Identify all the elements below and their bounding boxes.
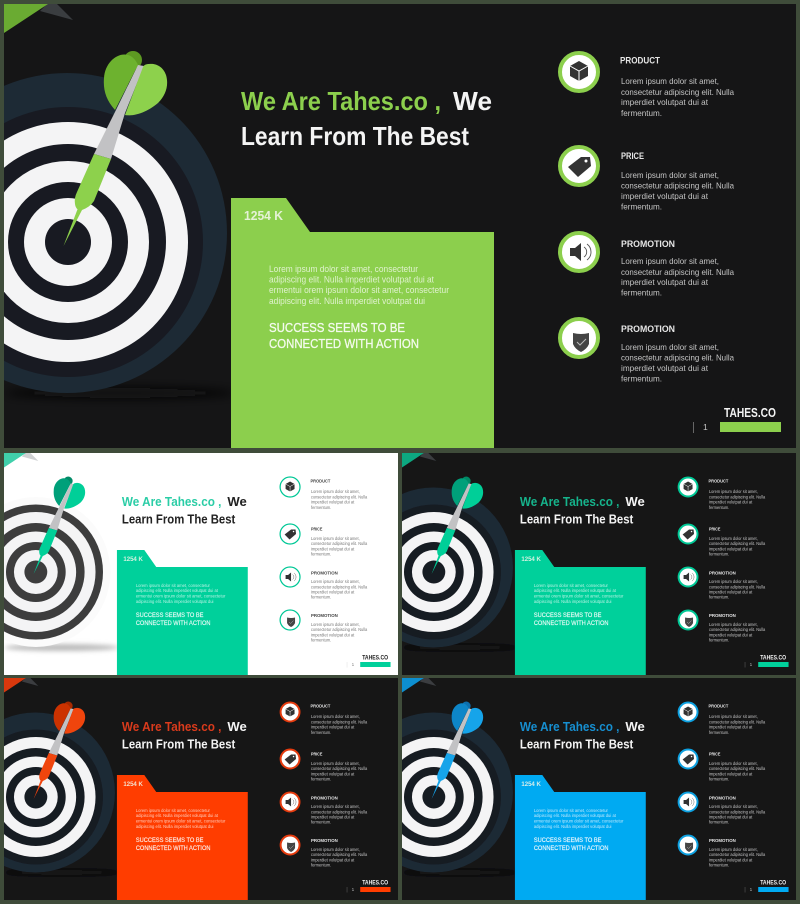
heading: We Are Tahes.co ,: [122, 494, 221, 509]
panel: blue folder card: Lorem ipsum dolor sit amet, consectetur: [534, 808, 608, 814]
panel: green folder card: ermentui orem ipsum dolor sit amet, consectetur: [269, 285, 449, 296]
heading: Learn From The Best: [520, 511, 634, 527]
feature: price: consectetur adipiscing elit. Nulla: [709, 766, 766, 771]
feature: product: PRODUCT: [708, 479, 729, 484]
feature: price: PRICE: [709, 526, 720, 532]
icon: dart: [34, 476, 85, 574]
feature: price: [679, 524, 766, 557]
feature: price: PRICE: [311, 751, 322, 757]
panel: blue folder card: SUCCESS SEEMS TO BE: [534, 837, 601, 844]
footer brand: 1: [750, 662, 753, 667]
feature: promotion speaker: fermentum.: [311, 820, 331, 825]
feature: price: imperdiet volutpat dui at: [709, 771, 753, 777]
footer brand: [745, 654, 789, 668]
heading: [520, 496, 644, 524]
footer brand: 1: [750, 887, 753, 892]
panel: blue folder card: ermentui orem ipsum dolor sit amet, consectetur: [534, 818, 624, 825]
corner ribbon: [4, 4, 73, 33]
panel: teal folder card: adipiscing elit. Nulla imperdiet volutpat dui: [136, 599, 213, 605]
feature: product: consectetur adipiscing elit. Nulla: [709, 719, 766, 725]
feature: promotion shield: imperdiet volutpat dui at: [709, 632, 753, 638]
panel: red folder card: SUCCESS SEEMS TO BE: [136, 837, 203, 844]
feature: price: fermentum.: [709, 777, 729, 782]
feature: price: PRICE: [709, 751, 720, 757]
panel: red folder card: Lorem ipsum dolor sit amet, consectetur: [136, 808, 210, 814]
icon: dartboard target: [0, 497, 119, 651]
heading: We: [625, 494, 645, 509]
feature: product: [281, 702, 368, 735]
feature: product: Lorem ipsum dolor sit amet,: [311, 489, 360, 494]
feature: promotion shield: consectetur adipiscing elit. Nulla: [311, 852, 368, 857]
feature: product: PRODUCT: [708, 704, 729, 709]
footer brand: 1: [352, 662, 355, 667]
panel: dark blue slide: [354, 678, 796, 900]
heading: We: [453, 86, 492, 116]
feature: product: [679, 478, 766, 510]
feature: price: Lorem ipsum dolor sit amet,: [311, 536, 360, 541]
feature: promotion shield: PROMOTION: [709, 838, 736, 843]
panel: green folder card: SUCCESS SEEMS TO BE: [269, 321, 405, 335]
feature: price: Lorem ipsum dolor sit amet,: [709, 761, 758, 766]
feature: promotion shield: fermentum.: [709, 638, 729, 643]
heading: Learn From The Best: [122, 511, 236, 527]
feature: promotion speaker: Lorem ipsum dolor sit amet,: [709, 579, 758, 584]
feature: promotion shield: PROMOTION: [621, 324, 675, 334]
heading: We Are Tahes.co ,: [520, 494, 619, 509]
feature: promotion shield: fermentum.: [311, 638, 331, 643]
footer brand: [745, 879, 789, 892]
feature: promotion shield: consectetur adipiscing elit. Nulla: [709, 627, 766, 632]
icon: dartboard target: [0, 73, 235, 398]
corner ribbon: [4, 678, 38, 692]
footer brand: TAHES.CO: [362, 654, 388, 662]
panel: blue folder card: adipiscing elit. Nulla imperdiet volutpat dui: [534, 824, 611, 830]
panel: teal folder card: SUCCESS SEEMS TO BE: [136, 612, 203, 619]
icon: dartboard target: [354, 712, 517, 875]
feature: product: imperdiet volutpat dui at: [709, 724, 753, 730]
panel: teal folder card: Lorem ipsum dolor sit amet, consectetur: [136, 583, 210, 589]
feature: promotion speaker: [281, 792, 368, 825]
feature: product: imperdiet volutpat dui at: [311, 724, 355, 730]
feature: price: consectetur adipiscing elit. Nulla: [709, 541, 766, 546]
feature: promotion shield: fermentum.: [311, 863, 331, 868]
feature: price: consectetur adipiscing elit. Nulla: [311, 541, 368, 546]
panel: blue folder card: CONNECTED WITH ACTION: [534, 845, 608, 852]
feature: promotion speaker: PROMOTION: [709, 570, 736, 576]
feature: promotion shield: imperdiet volutpat dui at: [709, 857, 753, 863]
heading: Learn From The Best: [122, 736, 236, 752]
feature: promotion speaker: fermentum.: [709, 820, 729, 825]
panel: green folder card: Lorem ipsum dolor sit amet, consectetur: [269, 264, 418, 275]
corner ribbon: [402, 453, 436, 468]
panel: main green slide: [0, 4, 796, 448]
feature: promotion speaker: consectetur adipiscing elit. Nulla: [709, 809, 766, 815]
feature: promotion shield: PROMOTION: [709, 613, 736, 618]
feature: price: [560, 147, 734, 212]
feature: product: [560, 53, 734, 118]
feature: promotion speaker: PROMOTION: [311, 570, 338, 576]
feature: price: consectetur adipiscing elit. Nulla: [621, 180, 734, 190]
feature: promotion shield: consectetur adipiscing elit. Nulla: [311, 627, 368, 632]
footer brand: [347, 654, 391, 668]
feature: promotion speaker: Lorem ipsum dolor sit amet,: [621, 256, 719, 266]
feature: promotion shield: [560, 319, 734, 384]
heading: We: [227, 494, 247, 509]
feature: product: fermentum.: [621, 108, 662, 118]
feature: product: imperdiet volutpat dui at: [621, 97, 709, 107]
panel: teal folder card: [117, 550, 248, 675]
feature: promotion speaker: fermentum.: [709, 595, 729, 600]
panel: teal folder card: [515, 550, 646, 675]
panel: green folder card: adipiscing elit. Nulla imperdiet volutpat dui at: [269, 274, 434, 286]
feature: promotion shield: [679, 610, 766, 643]
panel: teal folder card: CONNECTED WITH ACTION: [534, 620, 608, 627]
feature: product: imperdiet volutpat dui at: [709, 499, 753, 505]
feature: promotion speaker: fermentum.: [311, 595, 331, 600]
icon: dart: [34, 702, 85, 799]
feature: promotion speaker: PROMOTION: [311, 795, 338, 801]
feature: promotion speaker: Lorem ipsum dolor sit amet,: [311, 804, 360, 809]
feature: promotion shield: fermentum.: [709, 863, 729, 868]
feature: promotion speaker: consectetur adipiscing elit. Nulla: [311, 809, 368, 815]
feature: promotion shield: Lorem ipsum dolor sit amet,: [311, 847, 360, 852]
feature: product: consectetur adipiscing elit. Nulla: [709, 494, 766, 500]
feature: promotion shield: [679, 836, 766, 868]
feature: promotion shield: [281, 836, 368, 868]
feature: promotion speaker: [560, 233, 734, 298]
panel: red folder card: [117, 775, 248, 900]
feature: product: PRODUCT: [310, 479, 331, 484]
heading: [122, 496, 246, 524]
panel: blue folder card: 1254 K: [521, 781, 541, 788]
corner ribbon: [4, 453, 38, 468]
panel: teal folder card: adipiscing elit. Nulla imperdiet volutpat dui at: [534, 588, 617, 594]
panel: green folder card: CONNECTED WITH ACTION: [269, 337, 419, 351]
panel: teal folder card: 1254 K: [123, 556, 143, 563]
feature: promotion speaker: consectetur adipiscing elit. Nulla: [311, 584, 368, 590]
footer brand: TAHES.CO: [362, 879, 388, 887]
feature: promotion speaker: imperdiet volutpat dui at: [709, 814, 753, 820]
feature: promotion shield: Lorem ipsum dolor sit amet,: [709, 622, 758, 627]
feature: promotion speaker: imperdiet volutpat dui at: [621, 277, 709, 287]
feature: promotion speaker: consectetur adipiscing elit. Nulla: [621, 267, 734, 277]
feature: price: Lorem ipsum dolor sit amet,: [621, 170, 719, 180]
panel: teal folder card: ermentui orem ipsum dolor sit amet, consectetur: [534, 593, 624, 600]
heading: We Are Tahes.co ,: [241, 86, 441, 116]
panel: teal folder card: SUCCESS SEEMS TO BE: [534, 612, 601, 619]
panel: red folder card: CONNECTED WITH ACTION: [136, 845, 210, 852]
heading: [241, 91, 492, 146]
feature: price: imperdiet volutpat dui at: [311, 546, 355, 552]
panel: red folder card: adipiscing elit. Nulla imperdiet volutpat dui: [136, 824, 213, 830]
panel: light teal slide: [0, 453, 398, 675]
feature: promotion speaker: consectetur adipiscing elit. Nulla: [709, 584, 766, 590]
feature: product: fermentum.: [709, 730, 729, 735]
heading: We Are Tahes.co ,: [122, 719, 221, 734]
heading: [122, 722, 246, 748]
icon: dart: [64, 51, 167, 246]
feature: promotion shield: Lorem ipsum dolor sit amet,: [621, 342, 719, 352]
feature: promotion shield: Lorem ipsum dolor sit amet,: [709, 847, 758, 852]
feature: product: [679, 702, 766, 735]
feature: price: [280, 524, 368, 557]
panel: dark red slide: [0, 678, 398, 900]
panel: blue folder card: [515, 775, 646, 900]
feature: product: PRODUCT: [310, 704, 331, 709]
feature: promotion speaker: [679, 568, 766, 600]
icon: dartboard target: [0, 712, 119, 875]
feature: promotion speaker: PROMOTION: [621, 239, 675, 249]
feature: promotion speaker: imperdiet volutpat dui at: [709, 589, 753, 595]
feature: promotion shield: Lorem ipsum dolor sit amet,: [311, 622, 360, 627]
panel: teal folder card: 1254 K: [521, 556, 541, 563]
feature: product: consectetur adipiscing elit. Nulla: [621, 87, 734, 97]
panel: green folder card: 1254 K: [244, 208, 284, 223]
panel: green folder card: [231, 198, 494, 448]
feature: price: [679, 750, 766, 782]
footer brand: 1: [352, 887, 355, 892]
feature: promotion speaker: [679, 792, 766, 825]
icon: dartboard target: [402, 488, 515, 652]
panel: teal folder card: ermentui orem ipsum dolor sit amet, consectetur: [136, 593, 226, 600]
panel: dark teal slide: [402, 453, 796, 675]
feature: promotion speaker: PROMOTION: [709, 795, 736, 801]
heading: [520, 719, 645, 752]
panel: red folder card: ermentui orem ipsum dolor sit amet, consectetur: [136, 818, 226, 825]
feature: product: fermentum.: [311, 505, 331, 510]
icon: dart: [432, 476, 483, 574]
feature: promotion shield: imperdiet volutpat dui at: [311, 857, 355, 863]
footer brand: TAHES.CO: [724, 406, 776, 420]
heading: Learn From The Best: [241, 121, 469, 151]
feature: product: Lorem ipsum dolor sit amet,: [621, 76, 719, 86]
feature: price: [281, 750, 368, 782]
feature: product: PRODUCT: [620, 56, 660, 66]
feature: product: consectetur adipiscing elit. Nulla: [311, 494, 368, 500]
feature: product: Lorem ipsum dolor sit amet,: [709, 489, 758, 494]
feature: promotion shield: consectetur adipiscing elit. Nulla: [709, 852, 766, 857]
feature: price: imperdiet volutpat dui at: [621, 191, 709, 201]
feature: product: consectetur adipiscing elit. Nulla: [311, 719, 368, 725]
feature: product: fermentum.: [709, 505, 729, 510]
heading: We: [227, 719, 247, 734]
feature: price: Lorem ipsum dolor sit amet,: [311, 761, 360, 766]
panel: green folder card: adipiscing elit. Nulla imperdiet volutpat dui: [269, 296, 425, 307]
feature: promotion shield: imperdiet volutpat dui at: [311, 632, 355, 638]
feature: price: fermentum.: [621, 202, 662, 212]
feature: promotion shield: imperdiet volutpat dui at: [621, 363, 709, 373]
panel: teal folder card: adipiscing elit. Nulla imperdiet volutpat dui at: [136, 588, 219, 594]
footer brand: TAHES.CO: [760, 654, 786, 662]
heading: We Are Tahes.co ,: [520, 719, 619, 734]
feature: price: fermentum.: [311, 777, 331, 782]
panel: red folder card: adipiscing elit. Nulla imperdiet volutpat dui at: [136, 813, 219, 819]
heading: Learn From The Best: [520, 736, 634, 752]
feature: promotion speaker: imperdiet volutpat dui at: [311, 814, 355, 820]
feature: promotion shield: [280, 610, 368, 643]
icon: dart: [432, 702, 483, 799]
feature: promotion speaker: fermentum.: [621, 288, 662, 298]
feature: promotion shield: PROMOTION: [311, 613, 338, 618]
footer brand: [347, 879, 391, 892]
panel: blue folder card: adipiscing elit. Nulla imperdiet volutpat dui at: [534, 813, 617, 819]
feature: promotion speaker: Lorem ipsum dolor sit amet,: [709, 804, 758, 809]
panel: teal folder card: CONNECTED WITH ACTION: [136, 620, 210, 627]
footer brand: TAHES.CO: [760, 879, 786, 887]
corner ribbon: [402, 678, 436, 692]
footer brand: [693, 406, 781, 433]
feature: product: Lorem ipsum dolor sit amet,: [709, 714, 758, 719]
panel: teal folder card: Lorem ipsum dolor sit amet, consectetur: [534, 583, 608, 589]
feature: price: fermentum.: [709, 552, 729, 557]
feature: price: imperdiet volutpat dui at: [311, 771, 355, 777]
footer brand: 1: [703, 422, 708, 432]
feature: promotion shield: PROMOTION: [311, 838, 338, 843]
feature: price: fermentum.: [311, 552, 331, 557]
feature: product: [280, 477, 368, 510]
feature: promotion shield: fermentum.: [621, 374, 662, 384]
feature: price: imperdiet volutpat dui at: [709, 546, 753, 552]
heading: We: [625, 719, 645, 734]
feature: price: Lorem ipsum dolor sit amet,: [709, 536, 758, 541]
feature: price: PRICE: [311, 526, 322, 532]
feature: price: PRICE: [621, 151, 644, 161]
panel: red folder card: 1254 K: [123, 781, 143, 788]
feature: promotion shield: consectetur adipiscing elit. Nulla: [621, 352, 734, 362]
feature: price: consectetur adipiscing elit. Nulla: [311, 766, 368, 771]
panel: teal folder card: adipiscing elit. Nulla imperdiet volutpat dui: [534, 599, 611, 605]
feature: product: imperdiet volutpat dui at: [311, 499, 355, 505]
feature: promotion speaker: Lorem ipsum dolor sit amet,: [311, 579, 360, 584]
feature: promotion speaker: imperdiet volutpat dui at: [311, 589, 355, 595]
feature: product: fermentum.: [311, 730, 331, 735]
feature: promotion speaker: [280, 567, 368, 600]
feature: product: Lorem ipsum dolor sit amet,: [311, 714, 360, 719]
